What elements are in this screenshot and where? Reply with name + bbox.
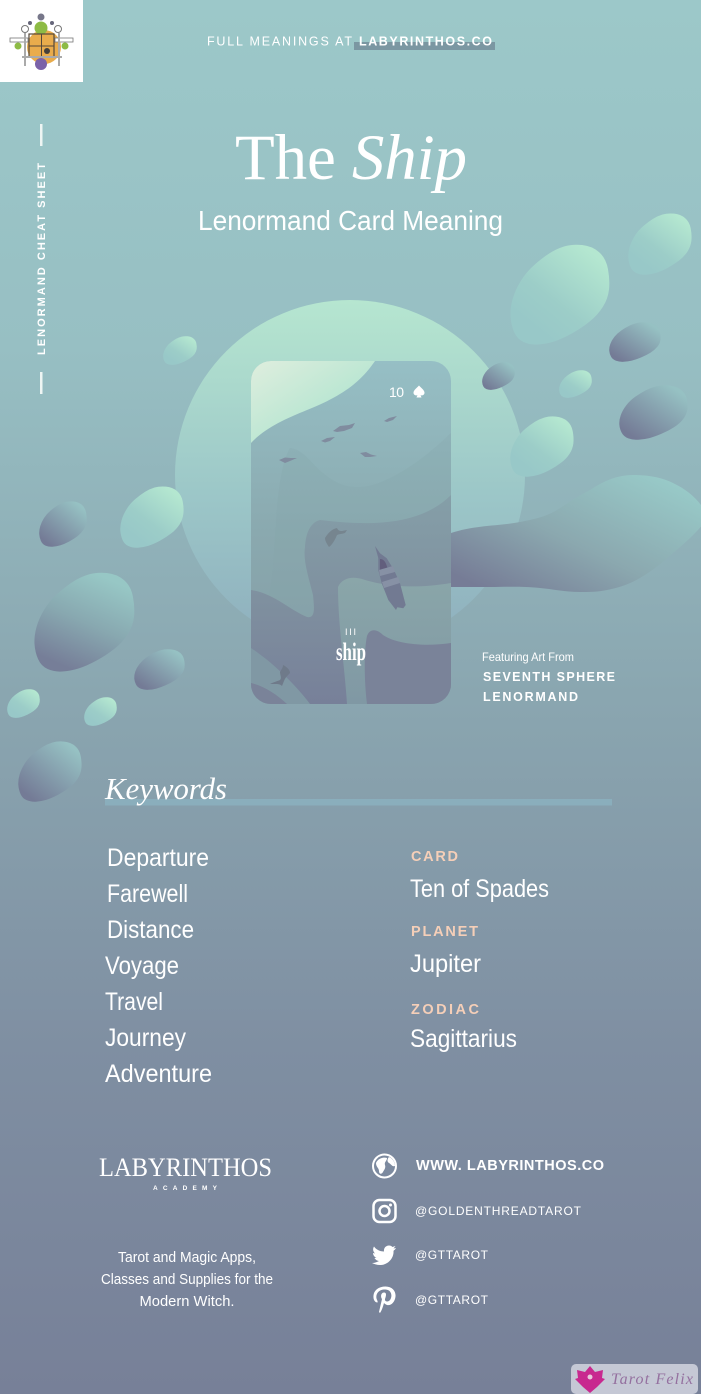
twitter handle: @GTTAROT: [415, 1248, 489, 1262]
icon: globe: [373, 1154, 396, 1178]
keyword list: Voyage: [105, 952, 179, 980]
card correspondences: [410, 849, 549, 1053]
logo: crest badge: [0, 0, 83, 82]
card correspondences: PLANET: [411, 924, 478, 940]
card index: 10 of spades: 10: [389, 384, 404, 400]
art credit: LENORMAND: [483, 690, 578, 704]
icon: twitter: [372, 1246, 396, 1265]
icon: pinterest: [373, 1286, 396, 1313]
card title: ship: ship: [336, 639, 366, 666]
keywords heading: [104, 771, 612, 806]
footer tagline: Classes and Supplies for the: [101, 1271, 273, 1288]
art credit: SEVENTH SPHERE: [483, 670, 615, 684]
tarot card: [251, 361, 451, 704]
vertical side label: LENORMAND CHEAT SHEET: [36, 163, 48, 355]
fish school: [279, 416, 397, 463]
card correspondences: Sagittarius: [410, 1025, 517, 1053]
footer logo: Labyrinthos Academy: LABYRINTHOS: [99, 1153, 272, 1182]
footer logo: Labyrinthos Academy: ACADEMY: [153, 1185, 218, 1192]
footer tagline: Modern Witch.: [140, 1293, 234, 1310]
keyword list: Journey: [105, 1024, 186, 1052]
card correspondences: ZODIAC: [411, 1002, 480, 1018]
floating blobs: [7, 213, 692, 802]
keyword list: Departure: [107, 844, 209, 872]
large wave blob: [451, 475, 701, 592]
keyword list: Adventure: [105, 1060, 212, 1088]
keyword list: Distance: [107, 916, 194, 944]
icon: instagram: [374, 1200, 396, 1222]
card title: ship: [336, 627, 366, 666]
instagram handle: @GOLDENTHREADTAROT: [415, 1204, 582, 1218]
keyword list: Travel: [105, 988, 163, 1016]
keyword list: [105, 844, 212, 1088]
art credit: [482, 650, 615, 704]
footer tagline: [101, 1249, 273, 1310]
card: upper contour layers: [268, 433, 451, 600]
website link: WWW. LABYRINTHOS.CO: [416, 1158, 604, 1174]
large circle: [175, 300, 525, 650]
card index: 10 of spades: [389, 384, 424, 400]
card: bottom dark region: [365, 630, 451, 704]
fish: lower left: [270, 665, 290, 686]
header link: FULL MEANINGS AT: [207, 34, 352, 48]
keywords heading: Keywords: [104, 771, 227, 806]
boat: [375, 546, 406, 610]
header link: [207, 34, 495, 50]
keyword list: Farewell: [107, 880, 188, 908]
card: light tongue: [338, 578, 451, 704]
footer tagline: Tarot and Magic Apps,: [118, 1249, 256, 1266]
title: The Ship: [235, 122, 467, 194]
card correspondences: Jupiter: [410, 950, 481, 978]
watermark badge: Tarot Felix: Tarot Felix: [611, 1371, 693, 1388]
fish: middle: [325, 528, 347, 547]
card correspondences: Ten of Spades: [410, 875, 549, 903]
watermark badge: Tarot Felix: [571, 1364, 698, 1394]
card correspondences: CARD: [411, 849, 458, 865]
card: lower-left band: [251, 648, 310, 704]
art credit: Featuring Art From: [482, 650, 574, 664]
pinterest handle: @GTTAROT: [415, 1293, 489, 1307]
card: dark region: [251, 495, 451, 704]
subtitle: Lenormand Card Meaning: [198, 205, 503, 236]
header link: LABYRINTHOS.CO: [359, 34, 492, 48]
card title: ship: III: [345, 627, 356, 637]
card: mint corner: [251, 361, 375, 443]
